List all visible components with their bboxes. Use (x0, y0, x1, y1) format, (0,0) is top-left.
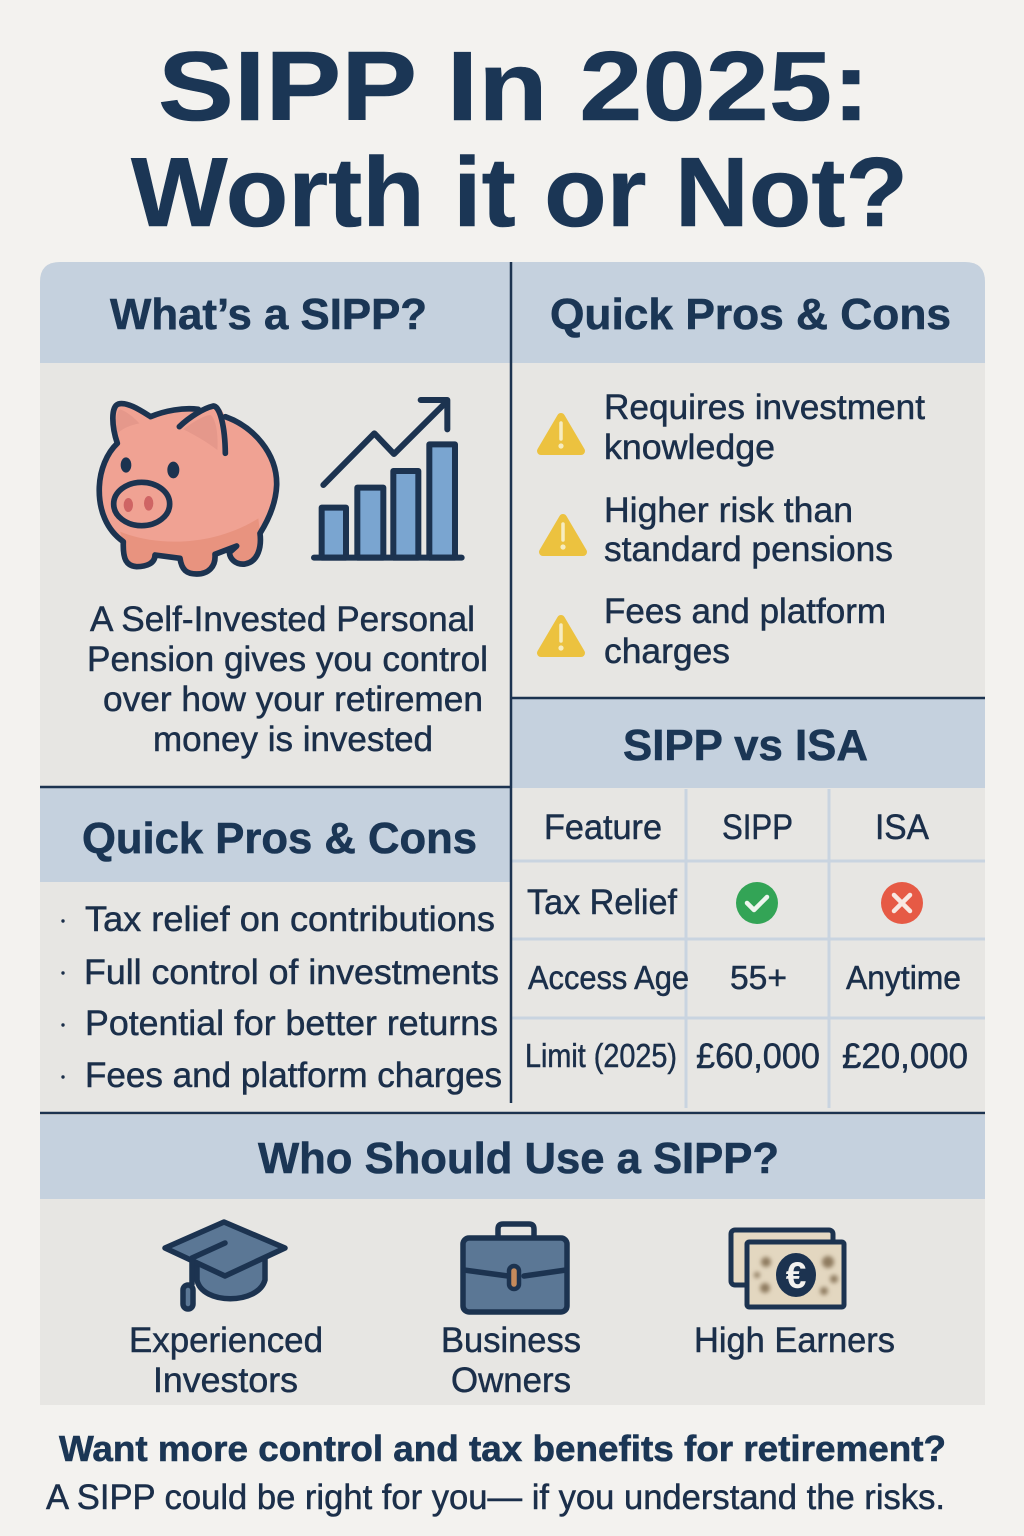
caution text 1 (604, 388, 925, 467)
icon: graduation cap (165, 1222, 285, 1309)
table header row: Feature (544, 808, 662, 847)
heading: Quick Pros and Cons, right: Quick Pros & Cons (550, 290, 951, 339)
description text: over how your retiremen (103, 680, 483, 719)
heading: SIPP vs ISA: SIPP vs ISA (623, 721, 868, 770)
caution text 3 (604, 592, 886, 671)
audience: experienced investors: Investors (153, 1361, 298, 1400)
heading: Who Should Use a SIPP: Who Should Use a SIPP? (258, 1134, 779, 1183)
panel: Quick Pros and Cons, benefits (40, 788, 510, 1095)
audience: business owners: Business (441, 1321, 581, 1360)
table row: access age (528, 959, 961, 996)
heading: What's a SIPP: What’s a SIPP? (110, 290, 427, 339)
title (131, 31, 908, 247)
icon: warning 3 (541, 619, 581, 653)
caution text 1: knowledge (604, 428, 775, 467)
title: SIPP In 2025: (158, 31, 870, 141)
footer call to action: Want more control and tax benefits for retirement? (59, 1428, 946, 1469)
description text: A Self-Invested Personal (90, 600, 475, 639)
table header row: SIPP (722, 808, 793, 847)
icon: banknotes (731, 1230, 844, 1307)
audience: high earners (694, 1230, 895, 1360)
panel: What's a SIPP (40, 262, 510, 759)
heading: What's a SIPP (40, 262, 510, 363)
description text: Pension gives you control (87, 640, 488, 679)
footer call to action (46, 1428, 946, 1517)
audience: high earners: High Earners (694, 1321, 895, 1360)
icon: red cross (881, 882, 923, 924)
table row: access age: Anytime (846, 959, 961, 996)
table row: limit 2025: Limit (2025) (525, 1037, 677, 1074)
benefit list (61, 900, 502, 1095)
caution text 2: standard pensions (604, 530, 893, 569)
panel: Who should use a SIPP (40, 1115, 985, 1400)
caution text 2: Higher risk than (604, 491, 853, 530)
icon: banknotes: € (786, 1255, 806, 1296)
heading: Quick Pros and Cons, left (40, 788, 510, 882)
caution text 1: Requires investment (604, 388, 925, 427)
heading: Quick Pros and Cons, left: Quick Pros & Cons (82, 814, 477, 863)
benefit list: Full control of investments (84, 953, 499, 992)
table row: limit 2025: £20,000 (842, 1037, 968, 1076)
benefit list: Fees and platform charges (85, 1056, 502, 1095)
caution text 3: Fees and platform (604, 592, 886, 631)
table row: limit 2025: £60,000 (696, 1037, 820, 1076)
table row: limit 2025 (525, 1037, 968, 1076)
panel: Quick Pros and Cons, cautions (512, 262, 985, 671)
icon: growth bar chart (314, 400, 462, 558)
title: Worth it or Not? (131, 137, 908, 247)
audience: experienced investors (129, 1222, 323, 1400)
table header row: ISA (875, 808, 930, 847)
footer call to action: A SIPP could be right for you— if you understand the risks. (46, 1478, 945, 1517)
audience: business owners: Owners (451, 1361, 571, 1400)
description text (87, 600, 488, 759)
icon: briefcase (463, 1224, 567, 1312)
benefit list: Tax relief on contributions (85, 900, 495, 939)
main panel background (40, 262, 985, 1405)
audience: experienced investors: Experienced (129, 1321, 323, 1360)
table row: tax relief: Tax Relief (527, 883, 677, 922)
table row: access age: Access Age (528, 959, 689, 996)
heading: SIPP vs ISA (512, 699, 985, 788)
panel: SIPP vs ISA table (512, 699, 985, 1108)
heading: Who Should Use a SIPP (40, 1115, 985, 1199)
table header row (544, 808, 930, 847)
table row: tax relief (527, 882, 923, 924)
icon: warning 2 (543, 518, 583, 552)
audience: business owners (441, 1224, 581, 1400)
benefit list: Potential for better returns (85, 1004, 498, 1043)
icon: green check (736, 882, 778, 924)
icon: warning 1 (541, 417, 581, 451)
caution text 3: charges (604, 632, 730, 671)
heading: Quick Pros and Cons, right (512, 262, 985, 363)
caution text 2 (604, 491, 893, 569)
description text: money is invested (153, 720, 433, 759)
icon: piggy bank (99, 404, 277, 574)
table row: access age: 55+ (730, 959, 787, 996)
